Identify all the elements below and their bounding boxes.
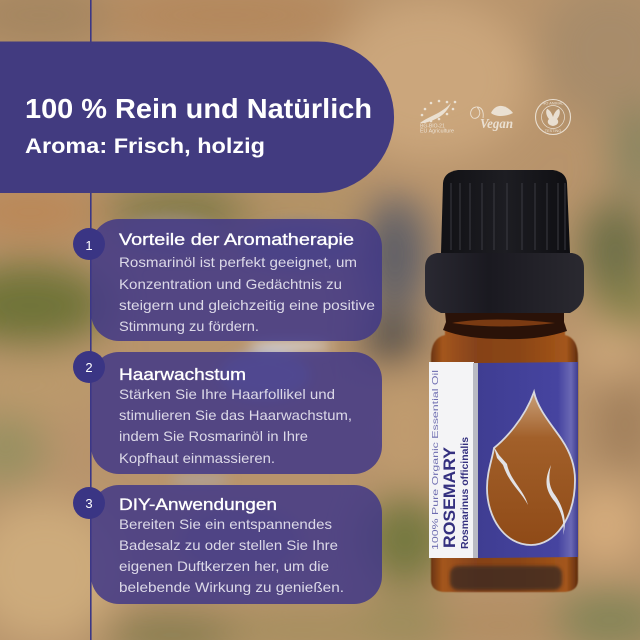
bottle body [431,325,578,592]
vertical timeline line [90,0,92,640]
icon: EU organic leaf [420,100,456,134]
label: ROSEMARY [441,447,459,548]
label [429,362,578,558]
label: Rosmarinus officinalis [460,437,471,549]
badge 1: 1 [85,238,93,253]
panel: card 3 [91,485,382,604]
icon: vegan mark [471,106,513,131]
body 3: Bereiten Sie ein entspannendes [119,516,332,532]
icon: oil drop [487,392,575,545]
body 2: stimulieren Sie das Haarwachstum, [119,407,352,423]
heading 1: Vorteile der Aromatherapie [119,230,354,249]
body 3 [119,516,344,595]
subtitle: Aroma: Frisch, holzig [25,135,265,158]
icon: no animal testing: NO ANIMAL [543,102,563,106]
body 3: belebende Wirkung zu genießen. [119,579,344,595]
body 2: Stärken Sie Ihre Haarfollikel und [119,386,335,402]
body 1 [119,254,375,334]
neck [443,312,567,339]
badge 3 [73,487,105,519]
body 1: steigern und gleichzeitig eine positive [119,297,375,313]
heading 3: DIY-Anwendungen [119,495,277,514]
icon: vegan mark: Vegan [480,116,513,131]
body 1: Rosmarinöl ist perfekt geeignet, um [119,254,357,270]
body 3: Badesalz zu oder stellen Sie Ihre [119,537,338,553]
cap [441,170,570,253]
panel: card 2 [91,352,382,474]
badge 2 [73,351,105,383]
icon: no animal testing [536,100,570,134]
icon: EU organic leaf: BG-BIO-21 [420,124,445,130]
icon: no animal testing: TESTING [545,129,561,133]
body 3: eigenen Duftkerzen her, um die [119,558,329,574]
panel: title banner [0,42,394,193]
collar [425,253,584,313]
body 2: indem Sie Rosmarinöl in Ihre [119,428,308,444]
heading 2: Haarwachstum [119,365,246,384]
badges row [420,100,570,134]
body 2: Kopfhaut einmassieren. [119,450,275,466]
badge 1 [73,228,105,260]
neck highlight [452,320,555,326]
title: 100 % Rein und Natürlich [25,93,372,124]
bottle base shadow [450,566,562,590]
panel: card 1 [91,219,382,341]
bottle [425,170,584,592]
body 2 [119,386,352,466]
label text: 100% Pure Organic Essential Oil [431,370,440,550]
body 1: Stimmung zu fördern. [119,318,259,334]
badge 2: 2 [85,360,93,375]
icon: EU organic leaf: EU Agriculture [420,128,454,134]
cap ridges [451,183,565,250]
badge 3: 3 [85,496,93,511]
body 1: Konzentration und Gedächtnis zu [119,276,342,292]
